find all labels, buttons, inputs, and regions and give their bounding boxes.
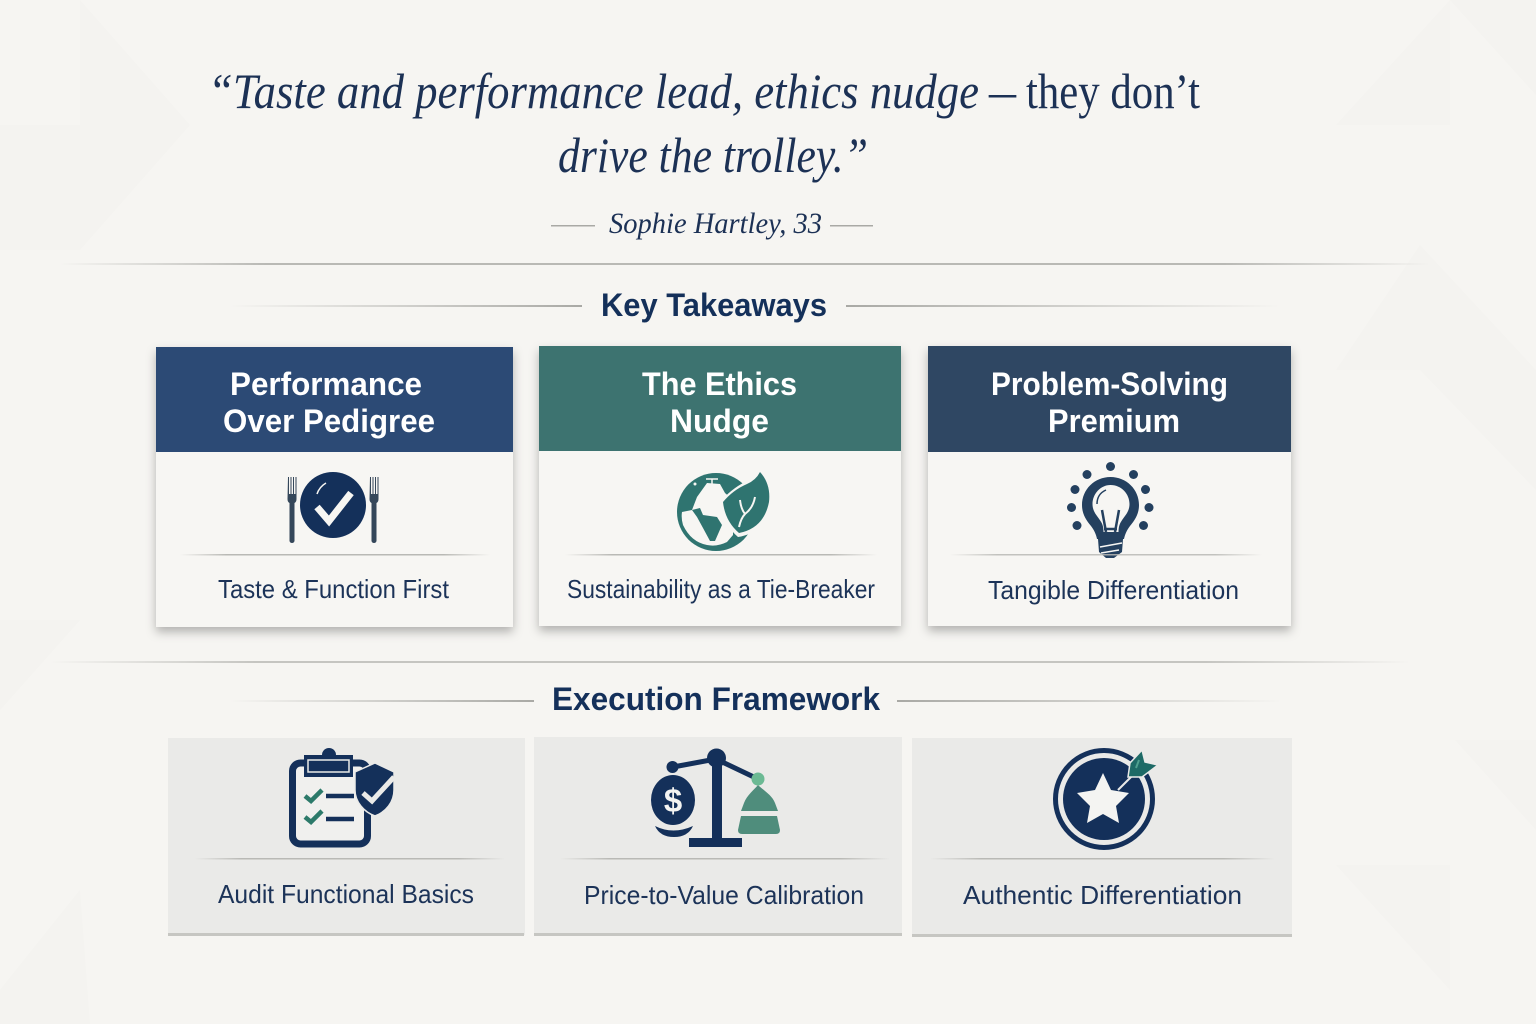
card heading: problem-solving premium: Premium <box>1048 403 1180 439</box>
heading: key takeaways: Key Takeaways <box>601 287 827 323</box>
card heading: problem-solving premium: Problem-Solving <box>991 366 1228 402</box>
icon: balance scale <box>651 748 780 847</box>
attribution: Sophie Hartley, 33 <box>609 207 822 240</box>
icon: star target with arrow <box>1056 750 1158 848</box>
label: authentic differentiation: Authentic Differentiation <box>963 880 1242 910</box>
panel: audit functional basics <box>168 738 525 936</box>
card heading: the ethics nudge <box>642 366 797 439</box>
card heading: performance over pedigree: Over Pedigree <box>223 403 435 439</box>
label: tangible differentiation: Tangible Differentiation <box>988 575 1239 605</box>
panel: performance over pedigree <box>156 347 513 627</box>
quote <box>208 63 1200 183</box>
panel: the ethics nudge <box>539 346 901 626</box>
icon: plate with check and forks <box>288 472 378 543</box>
quote: drive the trolley.” <box>558 127 868 183</box>
quote: – <box>988 63 1017 119</box>
quote: “Taste and performance lead, ethics nudge <box>208 63 979 119</box>
panel: authentic differentiation <box>912 738 1292 937</box>
card heading: performance over pedigree <box>223 366 435 439</box>
label: sustainability: Sustainability as a Tie-Breaker <box>567 574 875 604</box>
quote: they don’t <box>1026 63 1200 119</box>
panel: price-to-value calibration <box>534 737 902 936</box>
card heading: performance over pedigree: Performance <box>230 366 422 402</box>
card heading: problem-solving premium <box>991 366 1228 439</box>
icon: globe and leaf <box>677 469 772 551</box>
icon: light bulb <box>1067 462 1154 558</box>
heading: execution framework: Execution Framework <box>552 681 880 717</box>
label: audit functional basics: Audit Functional Basics <box>218 879 474 909</box>
card heading: the ethics nudge: Nudge <box>670 403 769 439</box>
label: price-to-value calibration: Price-to-Value Calibration <box>584 880 864 910</box>
card heading: the ethics nudge: The Ethics <box>642 366 797 402</box>
label: taste and function: Taste & Function First <box>218 574 450 604</box>
icon: balance scale: $ <box>664 782 682 819</box>
panel: problem-solving premium <box>928 346 1291 626</box>
icon: clipboard and shield <box>292 748 394 844</box>
